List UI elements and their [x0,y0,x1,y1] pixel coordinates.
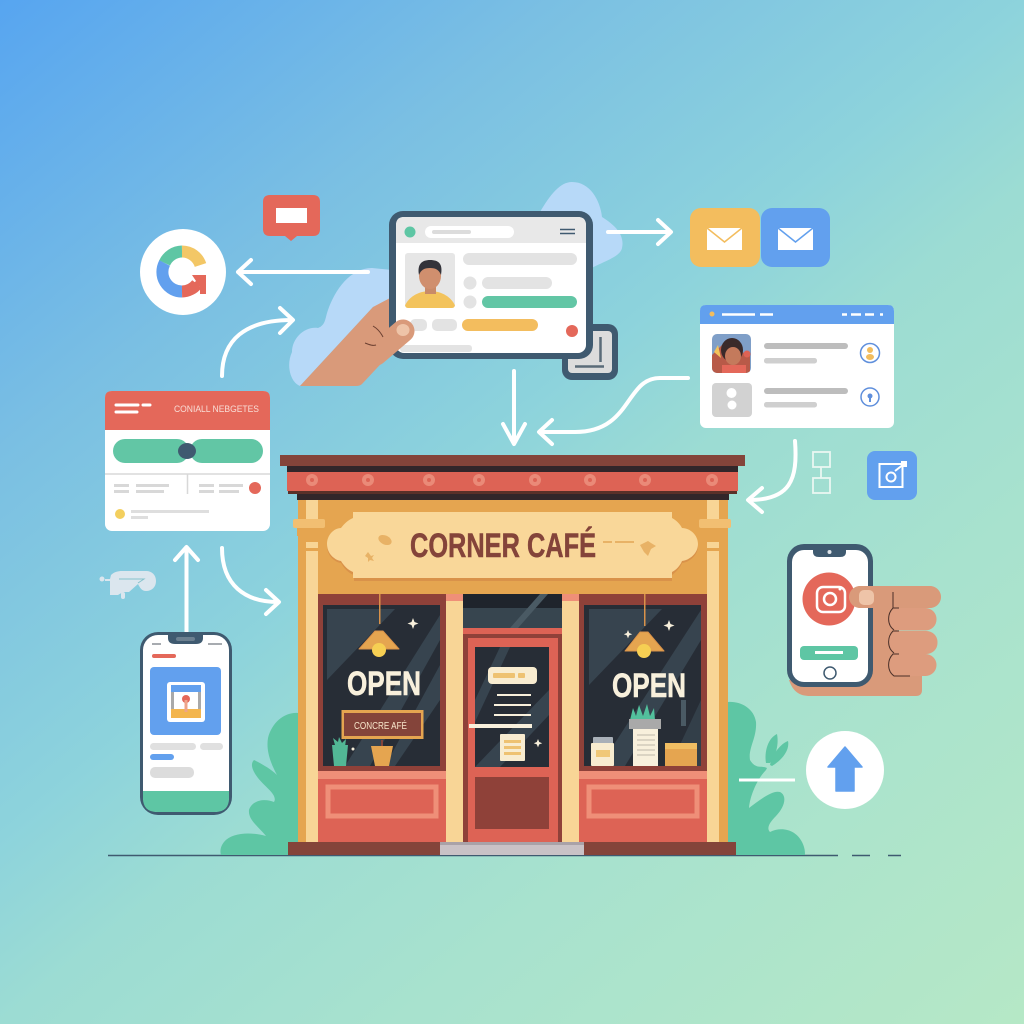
door [463,628,562,842]
hand holding tablet: thumb [365,324,410,354]
arrow: card to cafe [222,548,279,614]
green signup pill [113,439,263,463]
arrow: tablet to mail [608,220,671,244]
small cafe sign: CONCRE AFÉ [354,719,407,732]
profile rows [400,253,578,352]
door step [440,842,584,855]
arrow: tablet down to cafe [503,371,525,444]
tablet with business profile [389,211,593,359]
card heading: CONIALL NEBGETES [174,404,259,414]
cloud behind hand [289,268,392,386]
key badge [861,388,879,406]
blue mail icon [761,208,830,267]
arrow: email card to tablet [222,308,293,376]
right plant leaves [765,734,788,766]
sign title: CORNER CAFÉ [410,527,596,565]
center pillars [446,594,579,842]
hand behind right phone [789,590,922,696]
window plants and pots [332,737,393,766]
small gray gadget icon [100,571,156,599]
transom window [463,594,562,628]
door handle [469,724,532,728]
right pilaster [699,500,731,842]
cloud behind tablet [540,182,623,272]
Google style icon [140,229,226,315]
upload arrow circle [806,731,884,809]
pendant lamp [359,594,418,657]
listing text rows [764,343,848,408]
yellow mail icon [690,208,760,267]
facade wall [298,500,728,842]
base plinth [288,842,736,855]
card dividers and rows [105,474,270,519]
second reviewer placeholder [712,383,752,417]
arrow: tablet to Google [238,260,368,284]
hand holding tablet: palm [300,297,392,386]
review listing card [700,305,894,428]
flow diagram icon [813,452,830,493]
arrow: review card down to cafe [748,441,796,512]
door paper note [500,734,542,761]
storefront [280,455,745,855]
lower wall panels [318,771,707,842]
OPEN text left: OPEN [347,665,421,703]
mini shop thumbnail [167,682,205,722]
OPEN text right: OPEN [612,667,686,705]
cornice [280,455,745,500]
arrow: review card to cafe [539,378,688,444]
profile badge [860,344,880,362]
email newsletter card [105,391,270,531]
right shop window [579,594,707,771]
blue camera icon [867,451,917,500]
right phone with Instagram [787,544,873,687]
ground line [108,854,901,856]
door notice [488,667,537,715]
right plant [728,702,805,855]
red chat bubble icon [263,195,320,241]
small cafe sign [342,710,424,739]
sign board [327,512,698,581]
sign ornaments [365,533,656,562]
window display goods [591,704,697,766]
left plant [220,713,298,855]
left pilaster [293,500,325,842]
profile portrait [404,253,456,308]
reviewer portrait [712,334,751,373]
fingers of right hand [849,586,941,676]
short white line by plant [739,778,795,782]
pendant lamp [624,594,674,658]
arrow: phone up to card [175,547,198,632]
small square device behind tablet [562,324,618,380]
left shop window [318,594,446,771]
left phone with post [140,632,232,815]
